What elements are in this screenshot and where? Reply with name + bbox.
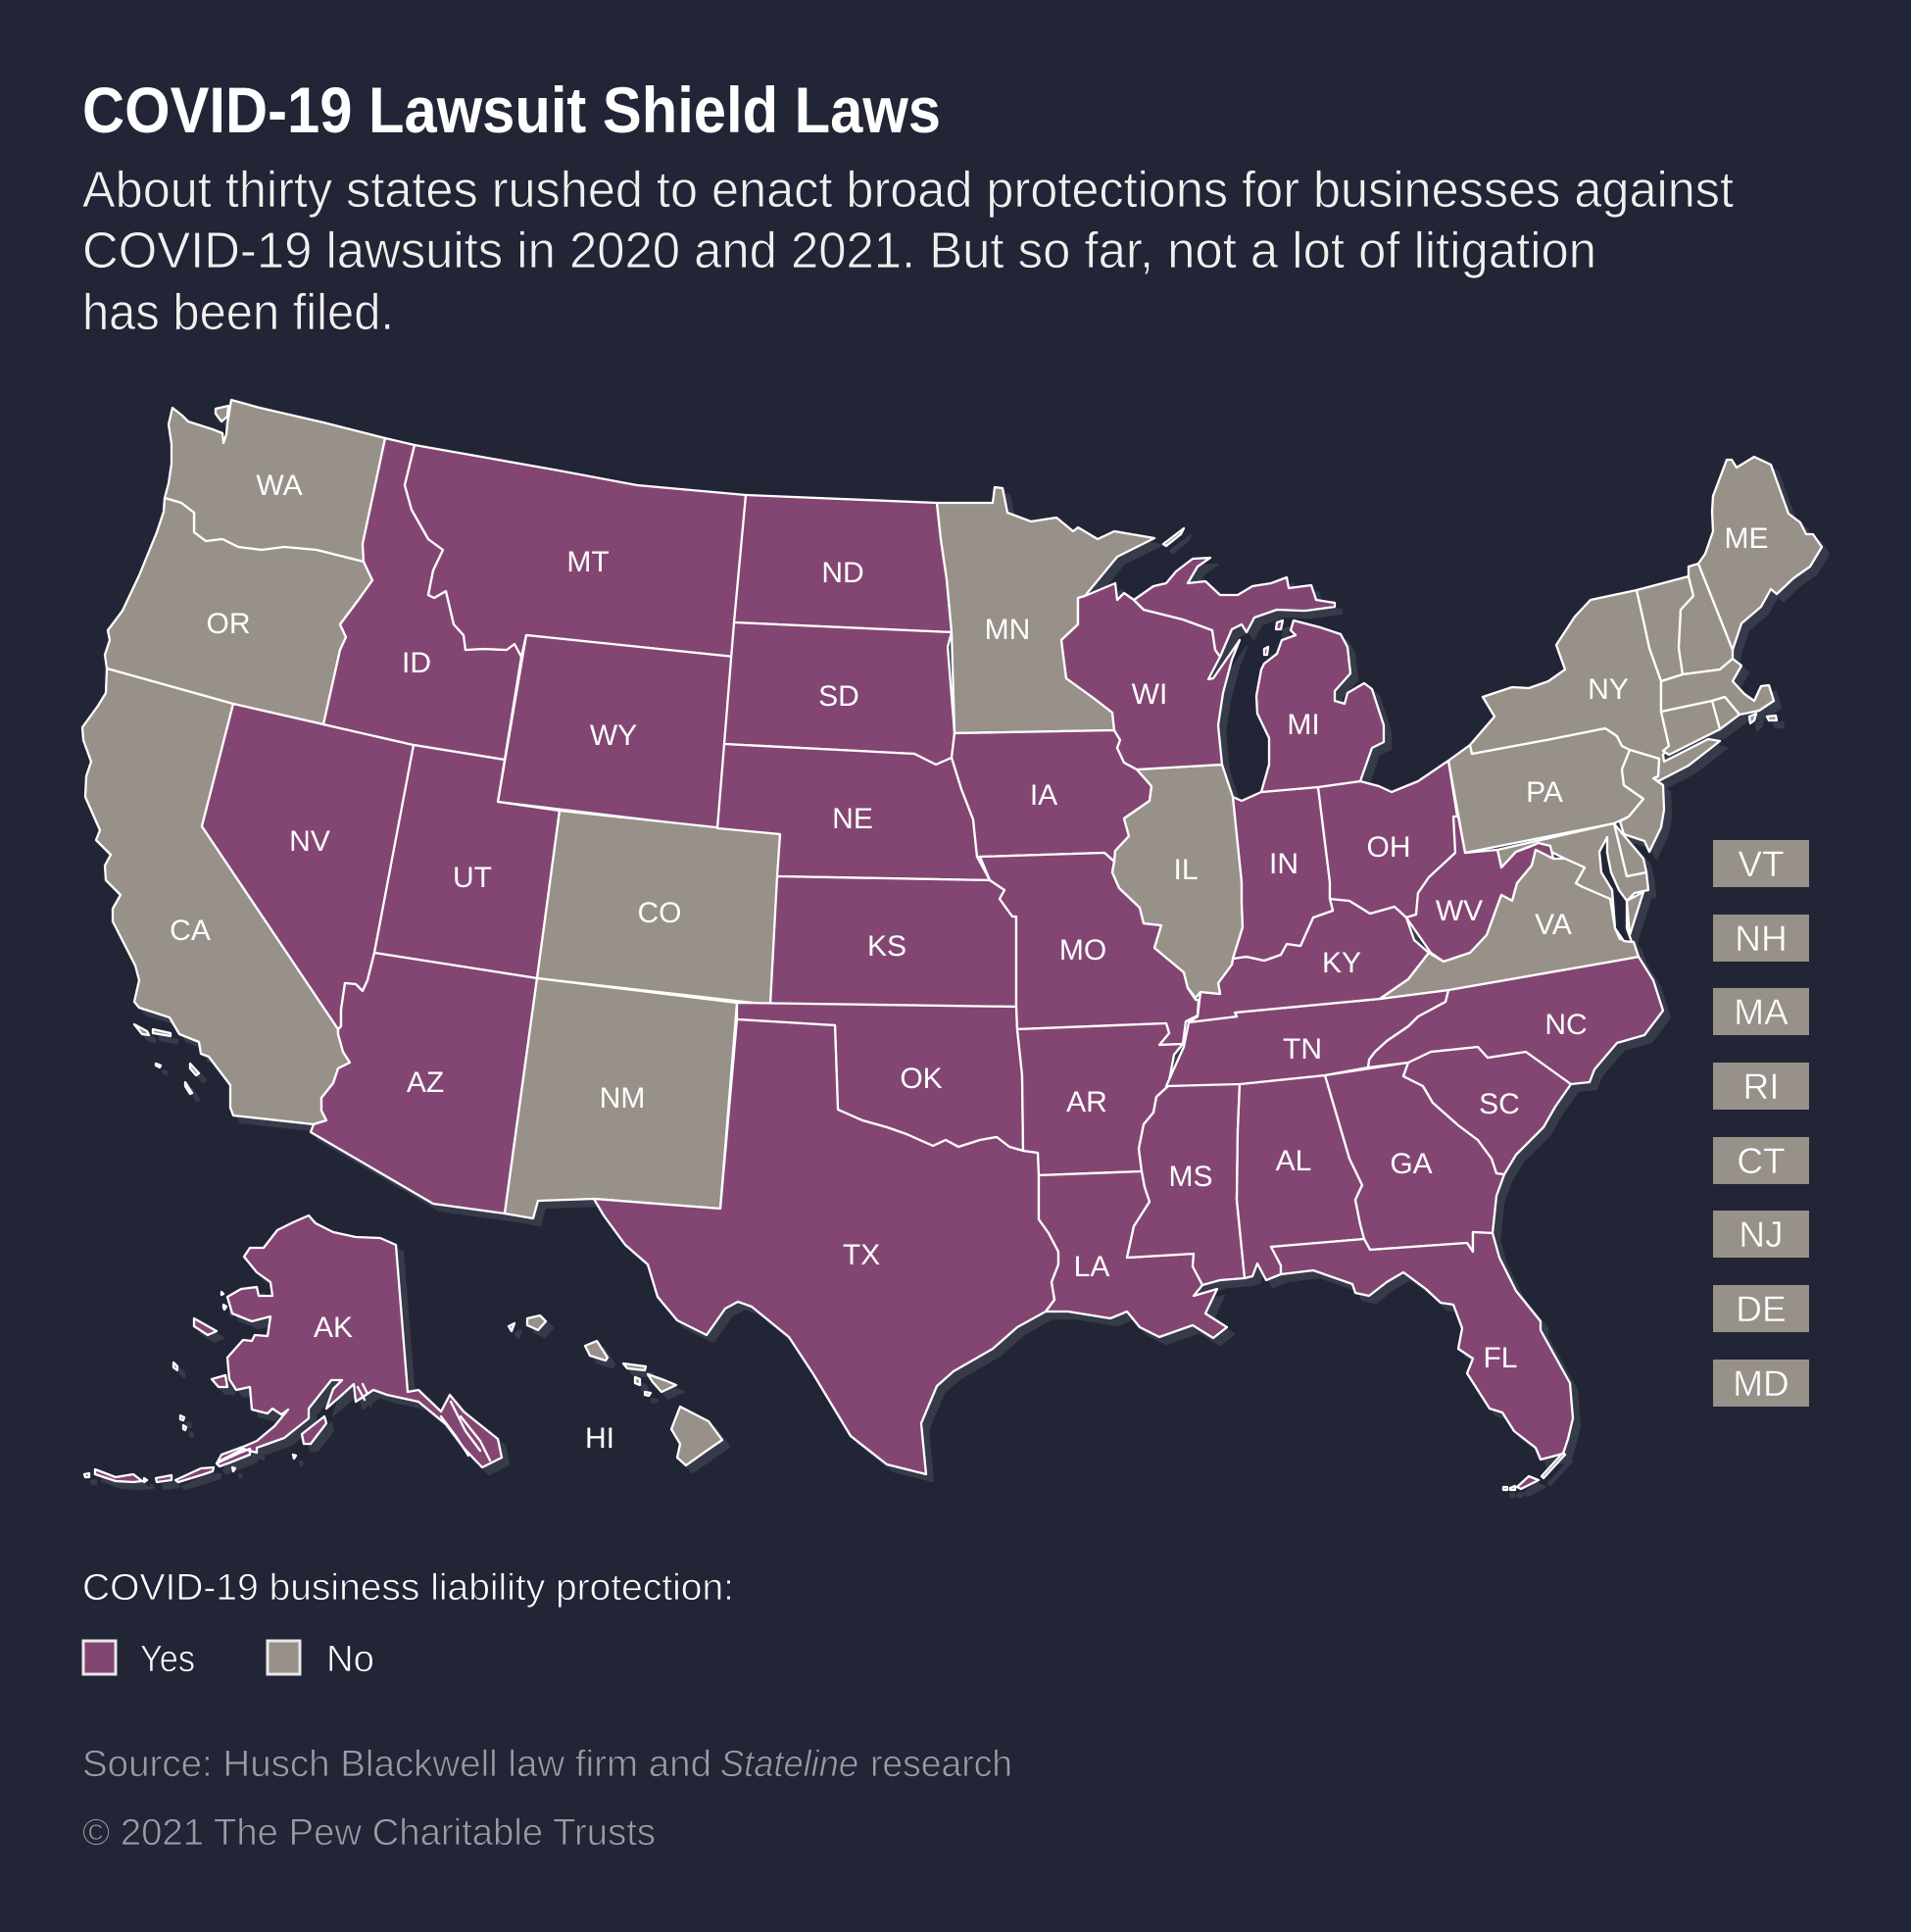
state abbreviation labels: NE — [832, 803, 873, 835]
state: ID — [323, 438, 521, 760]
state abbreviation labels: OH — [1366, 831, 1411, 864]
state: GA — [1325, 1063, 1504, 1252]
state abbreviation labels: CA — [170, 915, 211, 947]
state: AK — [84, 1215, 502, 1482]
small northeast state boxes: VT — [1738, 844, 1785, 884]
state: WA — [165, 400, 385, 562]
title: COVID-19 Lawsuit Shield Laws — [82, 74, 941, 146]
state abbreviation labels: OK — [900, 1063, 943, 1095]
state: UT — [374, 745, 560, 978]
source line: Stateline — [720, 1744, 858, 1785]
state abbreviation labels: AZ — [407, 1066, 444, 1099]
legend: Yes — [140, 1639, 195, 1680]
state: ME — [1698, 457, 1822, 650]
state: AL — [1237, 1075, 1364, 1280]
map of the United States — [82, 400, 1822, 1490]
state abbreviation labels: WY — [590, 719, 637, 752]
state: WI — [1061, 583, 1240, 769]
state abbreviation labels: ME — [1725, 522, 1768, 555]
state abbreviation labels: WV — [1436, 895, 1483, 927]
state: RI — [1712, 697, 1740, 729]
state abbreviation labels: UT — [453, 862, 492, 894]
alaska panhandle inlets — [358, 1384, 490, 1461]
state abbreviation labels — [170, 470, 1768, 1455]
small northeast state boxes: MA — [1734, 992, 1788, 1032]
state abbreviation labels: WI — [1132, 678, 1167, 711]
state abbreviation labels: KS — [867, 930, 906, 963]
state abbreviation labels: NC — [1544, 1009, 1588, 1041]
source line: Source: Husch Blackwell law firm and — [82, 1744, 711, 1785]
state abbreviation labels: AK — [314, 1312, 353, 1344]
legend: COVID-19 business liability protection: — [82, 1567, 734, 1609]
state abbreviation labels: TX — [843, 1239, 880, 1271]
state: KS — [770, 876, 1016, 1007]
state: WV — [1406, 817, 1553, 962]
state: AZ — [311, 953, 537, 1214]
state: CA — [82, 669, 350, 1124]
state abbreviation labels: SD — [818, 680, 859, 713]
state abbreviation labels: PA — [1526, 776, 1563, 809]
state: OK — [737, 1003, 1023, 1151]
state: CT — [1661, 701, 1720, 755]
state: TN — [1166, 990, 1448, 1086]
state: NE — [717, 744, 990, 880]
state: LA — [1039, 1171, 1227, 1338]
state: HI — [509, 1315, 722, 1465]
small northeast state boxes: RI — [1742, 1066, 1780, 1107]
state: DE — [1614, 823, 1646, 876]
state: NY — [1470, 590, 1720, 781]
state abbreviation labels: MT — [566, 546, 610, 578]
small northeast state boxes — [1713, 840, 1809, 1407]
state: MN — [937, 487, 1184, 733]
state abbreviation labels: TN — [1283, 1033, 1322, 1065]
state: VT — [1637, 576, 1693, 681]
state: AR — [1017, 1023, 1183, 1175]
state: IA — [952, 730, 1152, 862]
state: WY — [498, 635, 734, 828]
state abbreviation labels: VA — [1535, 909, 1572, 941]
source line — [82, 1744, 1012, 1785]
state abbreviation labels: IL — [1173, 854, 1199, 886]
state: MD — [1497, 823, 1648, 901]
state abbreviation labels: MN — [985, 614, 1030, 646]
legend — [82, 1567, 734, 1680]
legend: No — [326, 1639, 374, 1680]
state abbreviation labels: MO — [1059, 934, 1106, 966]
state abbreviation labels: OR — [206, 608, 251, 640]
state: NJ — [1620, 750, 1664, 852]
state abbreviation labels: MI — [1287, 709, 1320, 741]
state: OR — [105, 498, 372, 724]
state abbreviation labels: GA — [1390, 1148, 1433, 1180]
state abbreviation labels: NM — [600, 1082, 645, 1115]
source line: research — [870, 1744, 1012, 1785]
state: MI — [1134, 558, 1384, 792]
state: TX — [594, 1019, 1058, 1474]
small northeast state boxes: NJ — [1739, 1214, 1784, 1255]
state abbreviation labels: SC — [1479, 1088, 1520, 1120]
state: MS — [1127, 1083, 1245, 1285]
small northeast state boxes: MD — [1733, 1363, 1789, 1404]
state abbreviation labels: WA — [256, 470, 303, 502]
state: MO — [980, 853, 1199, 1045]
state: SD — [724, 622, 955, 765]
state abbreviation labels: HI — [585, 1422, 614, 1455]
state abbreviation labels: ND — [821, 557, 864, 589]
state abbreviation labels: AR — [1066, 1086, 1107, 1118]
state: OH — [1318, 761, 1457, 917]
state: NC — [1368, 957, 1663, 1084]
state: MA — [1661, 659, 1777, 723]
state: IN — [1233, 787, 1333, 961]
state abbreviation labels: IN — [1269, 848, 1298, 880]
state: KY — [1189, 899, 1429, 1022]
state abbreviation labels: MS — [1168, 1161, 1213, 1193]
subtitle: has been filed. — [82, 284, 394, 341]
state abbreviation labels: LA — [1074, 1251, 1109, 1283]
state abbreviation labels: NY — [1588, 673, 1629, 706]
small northeast state boxes: CT — [1737, 1141, 1786, 1181]
state: ND — [734, 495, 952, 632]
subtitle — [82, 162, 1735, 341]
state abbreviation labels: FL — [1483, 1342, 1518, 1374]
state: VA — [1380, 850, 1643, 999]
state: NM — [505, 978, 737, 1218]
copyright line: © 2021 The Pew Charitable Trusts — [82, 1812, 656, 1854]
state abbreviation labels: AL — [1276, 1145, 1311, 1177]
state abbreviation labels: NV — [289, 825, 330, 858]
subtitle: About thirty states rushed to enact broad protections for businesses against — [82, 162, 1735, 219]
state: IL — [1112, 765, 1243, 998]
state: PA — [1448, 728, 1643, 853]
state: SC — [1403, 1047, 1571, 1174]
state: MT — [405, 445, 746, 657]
state abbreviation labels: IA — [1030, 779, 1057, 812]
subtitle: COVID-19 lawsuits in 2020 and 2021. But so far, not a lot of litigation — [82, 223, 1596, 279]
state: NV — [202, 704, 414, 1029]
state: CO — [537, 811, 780, 1005]
state: NH — [1679, 564, 1733, 674]
chesapeake bay — [1599, 837, 1632, 942]
state abbreviation labels: KY — [1322, 947, 1361, 979]
small northeast state boxes: NH — [1735, 918, 1788, 959]
state: FL — [1271, 1232, 1573, 1490]
state abbreviation labels: CO — [637, 897, 682, 929]
small northeast state boxes: DE — [1736, 1289, 1787, 1329]
state abbreviation labels: ID — [402, 647, 431, 679]
